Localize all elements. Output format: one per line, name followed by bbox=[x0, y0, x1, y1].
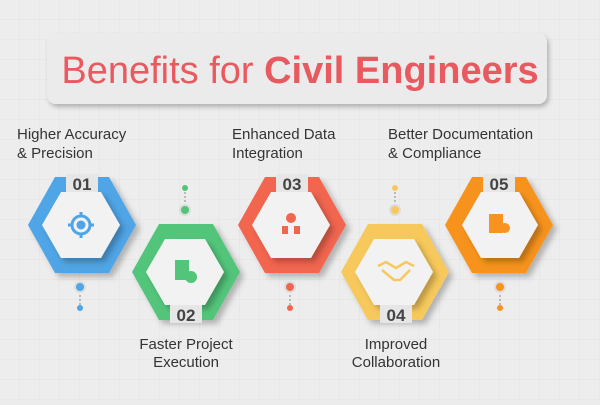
title bbox=[47, 33, 547, 104]
label: Better Documentation: Better Documentation bbox=[388, 126, 533, 143]
hexagon 03 red bbox=[238, 174, 346, 273]
label: Higher Accuracy: & Precision bbox=[17, 145, 93, 162]
icon: target bbox=[68, 212, 94, 238]
label: Improved Collaboration: Improved bbox=[365, 336, 427, 353]
hexagon 04 yellow: 04 bbox=[387, 306, 406, 325]
hexagon 03 red: 03 bbox=[283, 175, 301, 194]
label: Enhanced Data Integration: Integration bbox=[232, 145, 303, 162]
connector 04 bbox=[390, 185, 400, 215]
hexagon 05 orange: 05 bbox=[490, 175, 508, 194]
connector 02 bbox=[180, 185, 190, 215]
hexagon 02 green: 02 bbox=[177, 306, 195, 325]
connector 03 bbox=[285, 282, 295, 311]
label: Higher Accuracy: Higher Accuracy bbox=[17, 126, 127, 143]
title: Benefits for Civil Engineers bbox=[61, 50, 539, 92]
label: Enhanced Data Integration: Enhanced Data bbox=[232, 126, 336, 143]
icon: handshake bbox=[378, 262, 414, 280]
label: Faster Project Execution: Faster Project bbox=[139, 336, 234, 353]
hexagon 02 green bbox=[132, 224, 240, 325]
hexagon 05 orange bbox=[445, 174, 553, 273]
hexagon 04 yellow bbox=[341, 224, 449, 325]
label: Improved Collaboration: Collaboration bbox=[352, 354, 440, 371]
connector 01 bbox=[75, 282, 85, 311]
label: Faster Project Execution bbox=[139, 336, 234, 371]
hexagon 01 blue bbox=[28, 174, 136, 273]
label: Better Documentation: & Compliance bbox=[388, 145, 481, 162]
label: Higher Accuracy bbox=[17, 126, 127, 162]
label: Better Documentation bbox=[388, 126, 533, 162]
icon: document gear bbox=[175, 260, 197, 283]
connector 05 bbox=[495, 282, 505, 311]
label: Improved Collaboration bbox=[352, 336, 440, 371]
icon: data integration bbox=[282, 213, 300, 234]
label: Enhanced Data Integration bbox=[232, 126, 336, 162]
hexagon 01 blue: 01 bbox=[73, 175, 91, 194]
icon: documents check bbox=[489, 214, 510, 233]
label: Faster Project Execution: Execution bbox=[153, 354, 219, 371]
